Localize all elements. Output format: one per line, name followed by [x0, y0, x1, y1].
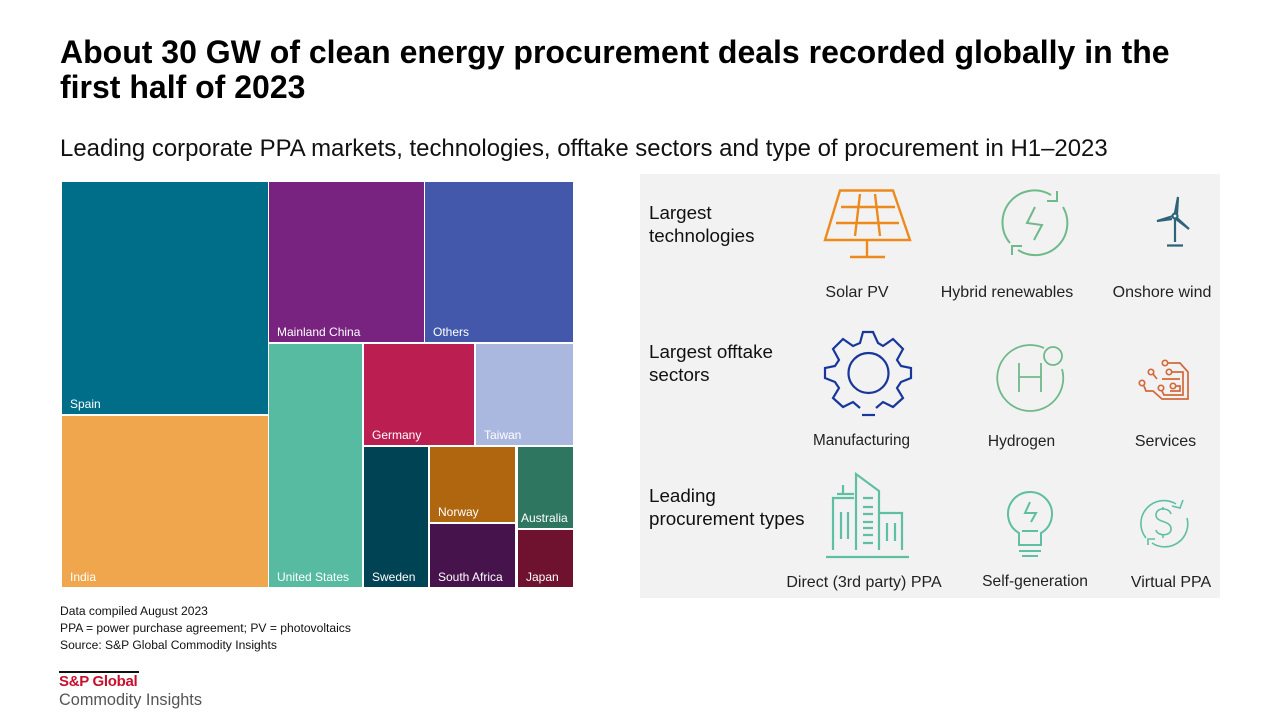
tile: Germany [364, 344, 474, 445]
subtitle: Leading corporate PPA markets, technologies, offtake sectors and type of procurement in H1–2023 [60, 135, 1108, 162]
label: Hydrogen: Hydrogen [988, 433, 1055, 450]
tile: United States: United States [277, 570, 349, 584]
heading: leading procurement types: Leading [649, 485, 716, 506]
tile: Japan [518, 530, 573, 587]
treemap chart [62, 182, 573, 587]
tile: Norway [430, 447, 515, 522]
tile: Taiwan [476, 344, 573, 445]
tile: Australia [518, 447, 573, 528]
tile: Mainland China: Mainland China [277, 325, 360, 339]
label: Manufacturing: Manufacturing [813, 432, 910, 449]
footnotes [60, 604, 351, 652]
icon: self-generation light bulb [1008, 492, 1052, 556]
tile: United States [269, 344, 362, 587]
tile: Spain [62, 182, 268, 414]
heading: largest technologies: technologies [649, 225, 754, 246]
label: Services: Services [1135, 433, 1196, 450]
logo: S&P Global Commodity Insights [59, 671, 202, 709]
label: Hybrid renewables: Hybrid renewables [941, 284, 1073, 301]
tile: Others: Others [433, 325, 469, 339]
label: Direct (3rd party) PPA: Direct (3rd party) PPA [786, 574, 942, 591]
title [60, 34, 1170, 105]
tile: Norway: Norway [438, 505, 479, 519]
heading: leading procurement types: procurement types [649, 508, 805, 529]
title: About 30 GW of clean energy procurement deals recorded globally in the [60, 34, 1170, 70]
tile: Spain: Spain [70, 397, 101, 411]
icon: hybrid renewables [1003, 190, 1067, 255]
logo: S&P Global Commodity Insights: S&P Global [59, 673, 137, 690]
tile: Germany: Germany [372, 428, 421, 442]
footnotes: Data compiled August 2023 [60, 604, 208, 618]
tile: Others [425, 182, 573, 342]
icon: city buildings [826, 474, 909, 557]
title: first half of 2023 [60, 69, 305, 105]
icon: services circuit [1139, 360, 1188, 399]
tile: Japan: Japan [526, 570, 559, 584]
heading: largest offtake sectors: Largest offtake [649, 341, 773, 362]
footnotes: PPA = power purchase agreement; PV = photovoltaics [60, 621, 351, 635]
label: Solar PV: Solar PV [825, 284, 889, 301]
icon: onshore wind turbine [1157, 197, 1189, 246]
heading: largest technologies: Largest [649, 202, 712, 223]
tile: South Africa [430, 524, 515, 587]
footnotes: Source: S&P Global Commodity Insights [60, 638, 277, 652]
tile: India: India [70, 570, 96, 584]
label: Virtual PPA: Virtual PPA [1131, 574, 1211, 591]
label: Self-generation: Self-generation [982, 573, 1088, 590]
tile: Taiwan: Taiwan [484, 428, 521, 442]
tile: India [62, 416, 268, 587]
tile: Sweden [364, 447, 428, 587]
logo: S&P Global Commodity Insights: Commodity Insights [59, 691, 202, 709]
icon: virtual PPA dollar [1141, 500, 1188, 547]
icon: hydrogen [997, 345, 1063, 411]
label: Onshore wind: Onshore wind [1113, 284, 1211, 301]
icon: manufacturing gear [825, 332, 911, 415]
panel: icons [640, 174, 1220, 598]
tile: Mainland China [269, 182, 424, 342]
tile: Australia: Australia [521, 511, 568, 525]
tile: Sweden: Sweden [372, 570, 415, 584]
icon: solar panel [825, 190, 910, 257]
heading: largest offtake sectors [649, 341, 773, 385]
heading: largest technologies [649, 202, 754, 246]
heading: leading procurement types [649, 485, 805, 529]
heading: largest offtake sectors: sectors [649, 364, 710, 385]
tile: South Africa: South Africa [438, 570, 503, 584]
